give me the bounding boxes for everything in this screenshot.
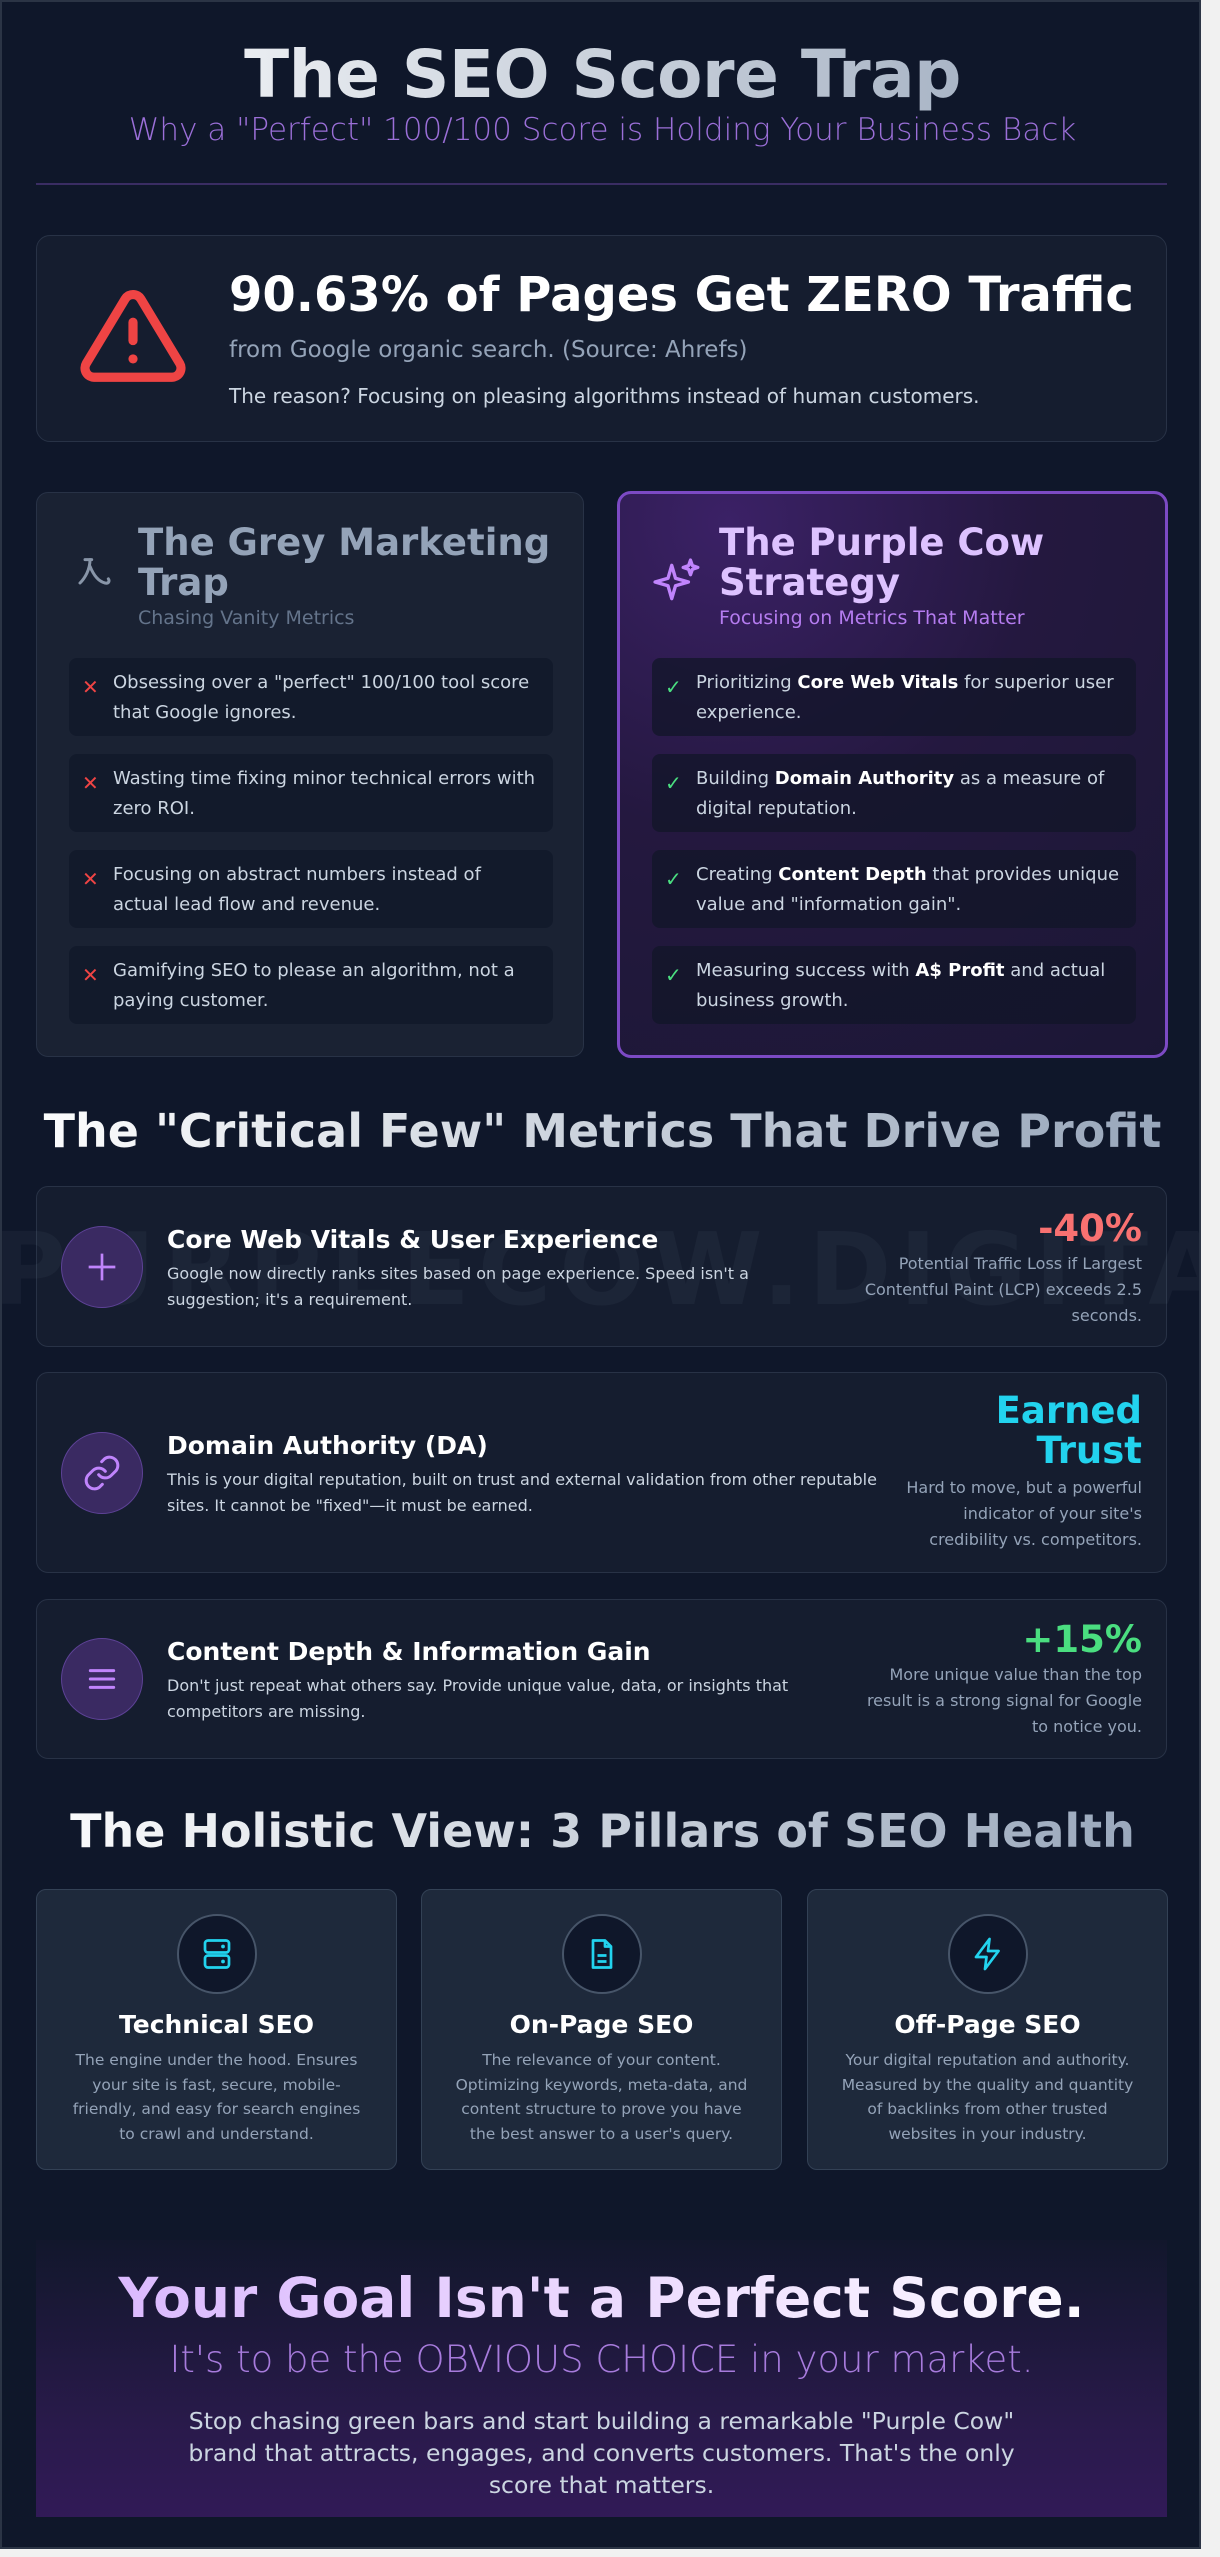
item 1: ✕ [82,675,99,699]
item 3: Creating Content Depth that provides unique [696,864,1119,885]
icon: lines [61,1638,143,1720]
metric title: Content Depth & Information Gain [167,1637,651,1666]
grey subtitle: Chasing Vanity Metrics [138,607,354,629]
metric desc: Google now directly ranks sites based on page experience. Speed isn't a suggestion; it's a requirement. [167,1264,749,1309]
item 4: paying customer. [113,990,268,1011]
stat earned trust: Earned [996,1389,1142,1432]
item 1 [652,658,1136,736]
metric card: domain authority [36,1372,1167,1573]
stat +15%: +15% [1022,1618,1142,1661]
pillar: technical seo [36,1889,397,2170]
purple subtitle: Focusing on Metrics That Matter [719,607,1025,629]
item 2: zero ROI. [113,798,195,819]
item 3 [69,850,553,928]
purple heading: The Purple Cow [719,521,1044,564]
item 3 [652,850,1136,928]
pillar: on-page seo [421,1889,782,2170]
metric title: Core Web Vitals & User Experience [167,1225,658,1254]
stat -40%: Potential Traffic Loss if Largest Contentful Paint (LCP) exceeds 2.5 seconds. [865,1254,1142,1325]
item 3: value and "information gain". [696,894,961,915]
alert heading: 90.63% of Pages Get ZERO Traffic [229,267,1134,323]
item 1: that Google ignores. [113,702,296,723]
icon: sparkles [653,558,700,600]
item 1: Obsessing over a "perfect" 100/100 tool score [113,672,529,693]
item 4: Measuring success with A$ Profit and actual [696,960,1105,981]
item 4 [69,946,553,1024]
icon: bolt [948,1914,1028,1994]
alert card [36,235,1167,442]
item 2: Building Domain Authority as a measure of [696,768,1104,789]
purple heading: Strategy [719,561,900,604]
grey heading: The Grey Marketing [138,521,550,564]
metric title: Domain Authority (DA) [167,1431,488,1460]
icon: document [562,1914,642,1994]
stat -40% [865,1207,1142,1325]
item 3: Focusing on abstract numbers instead of [113,864,481,885]
item 1: experience. [696,702,802,723]
item 2: ✓ [665,771,682,795]
item 1 [69,658,553,736]
cta panel [36,2240,1167,2517]
stat earned trust: Hard to move, but a powerful indicator of your site's credibility vs. competitors. [906,1478,1142,1549]
icon: plus [61,1226,143,1308]
item 2: Wasting time fixing minor technical errors with [113,768,535,789]
pillar: off-page seo: Your digital reputation and authority. Measured by the quality and quantity of backlinks from other trusted websites in your industry. [842,2051,1133,2142]
item 2: ✕ [82,771,99,795]
icon: link [61,1432,143,1514]
item 2 [69,754,553,832]
subtitle: Why a "Perfect" 100/100 Score is Holding Your Business Back [129,112,1076,148]
item 1: Prioritizing Core Web Vitals for superior user [696,672,1114,693]
stat +15% [867,1618,1142,1736]
icon: warning triangle [80,290,186,382]
grey heading [138,521,550,604]
cta subheading: It's to be the OBVIOUS CHOICE in your market. [169,2338,1034,2381]
item 4: business growth. [696,990,849,1011]
item 4: Gamifying SEO to please an algorithm, not a [113,960,515,981]
section heading: critical few: The "Critical Few" Metrics That Drive Profit [44,1104,1161,1158]
alert reason: The reason? Focusing on pleasing algorithms instead of human customers. [229,384,980,408]
cta heading: Your Goal Isn't a Perfect Score. [118,2266,1085,2330]
panel: purple cow strategy [617,491,1168,1058]
grey heading: Trap [138,561,229,604]
stat -40%: -40% [1038,1207,1142,1250]
alert source: from Google organic search. (Source: Ahrefs) [229,337,748,363]
metric card: core web vitals [36,1186,1167,1347]
item 3: actual lead flow and revenue. [113,894,380,915]
item 2: digital reputation. [696,798,857,819]
stat earned trust: Trust [1037,1429,1142,1472]
item 1: ✓ [665,675,682,699]
item 4: ✓ [665,963,682,987]
panel: grey marketing trap [36,492,584,1057]
cta body: Stop chasing green bars and start building a remarkable "Purple Cow" brand that attracts, engages, and converts customers. That's the only score that matters. [188,2407,1015,2499]
item 4: ✕ [82,963,99,987]
pillar: on-page seo: The relevance of your content. Optimizing keywords, meta-data, and content structure to prove you have the best answer to a user's query. [456,2051,747,2142]
pillar: off-page seo: Off-Page SEO [894,2010,1081,2039]
icon: grey fork [78,558,110,585]
title [2,30,1203,120]
metric desc: This is your digital reputation, built on trust and external validation from other reputable sites. It cannot be "fixed"—it must be earned. [167,1470,877,1515]
title: The SEO Score Trap [244,36,961,113]
stat +15%: More unique value than the top result is a strong signal for Google to notice you. [867,1665,1142,1736]
stat earned trust [906,1389,1142,1549]
item 4 [652,946,1136,1024]
pillar: off-page seo [807,1889,1168,2170]
metric card: content depth [36,1599,1167,1759]
item 3: ✓ [665,867,682,891]
icon: server [177,1914,257,1994]
pillar: on-page seo: On-Page SEO [510,2010,693,2039]
pillar: technical seo: Technical SEO [119,2010,314,2039]
item 2 [652,754,1136,832]
pillar: technical seo: The engine under the hood. Ensures your site is fast, secure, mobile-friendly, and easy for search engines to crawl and understand. [73,2051,360,2142]
item 3: ✕ [82,867,99,891]
purple heading [719,521,1044,604]
section heading: holistic view: The Holistic View: 3 Pillars of SEO Health [70,1804,1135,1858]
metric desc: Don't just repeat what others say. Provide unique value, data, or insights that competitors are missing. [167,1676,788,1721]
